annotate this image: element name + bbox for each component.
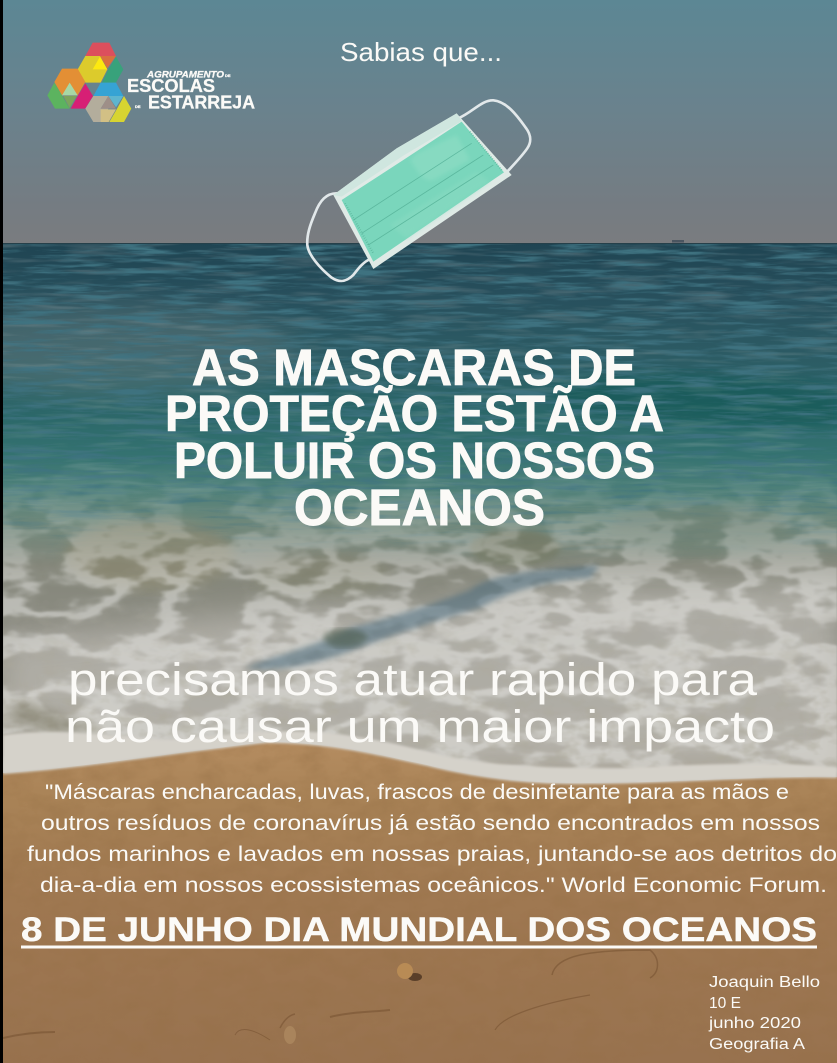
- distant ship: [672, 240, 684, 242]
- wet sand: [3, 735, 837, 1063]
- logo wordmark: ESCOLAS: [127, 76, 215, 96]
- mask ear loops: [307, 100, 530, 281]
- author credits: junho 2020: [708, 1015, 801, 1032]
- subtitle: [65, 654, 775, 752]
- quote from World Economic Forum: fundos marinhos e lavados em nossas praias, juntando-se aos detritos do: [27, 843, 837, 866]
- foam and wet sand texture: [70, 517, 226, 584]
- heading: World Oceans Day: 8 DE JUNHO DIA MUNDIAL DOS OCEANOS: [21, 911, 817, 949]
- main title: PROTEÇÃO ESTÃO A: [165, 384, 664, 442]
- author credits: Joaquin Bello: [709, 974, 820, 991]
- author credits: [708, 974, 820, 1053]
- main title: AS MASCARAS DE: [192, 339, 636, 396]
- logo: Agrupamento de Escolas de Estarreja: [47, 43, 255, 122]
- logo mark: coloured hexagons: [47, 43, 131, 122]
- main title: [165, 339, 664, 536]
- logo wordmark: [127, 70, 255, 112]
- shoreline foam: [3, 731, 837, 784]
- mask stitched edges: [345, 132, 502, 253]
- main title: POLUIR OS NOSSOS: [174, 432, 655, 489]
- quote from World Economic Forum: [27, 781, 837, 897]
- surgical mask illustration: [307, 100, 530, 281]
- logo wordmark: AGRUPAMENTO: [146, 70, 225, 80]
- subtitle: precisamos atuar rapido para: [68, 654, 758, 705]
- logo wordmark: ESTARREJA: [148, 92, 255, 112]
- main title: OCEANOS: [294, 479, 545, 536]
- author credits: Geografia A: [709, 1036, 806, 1053]
- intro text: Sabias que: Sabias que...: [340, 37, 502, 67]
- quote from World Economic Forum: outros resíduos de coronavírus já estão sendo encontrados em nossos: [41, 812, 820, 835]
- quote from World Economic Forum: dia-a-dia em nossos ecossistemas oceânicos." World Economic Forum.: [40, 874, 827, 897]
- logo wordmark: DE: [225, 73, 231, 78]
- logo wordmark: DE: [135, 104, 141, 109]
- quote from World Economic Forum: "Máscaras encharcadas, luvas, frascos de desinfetante para as mãos e: [45, 781, 789, 804]
- mask body: [333, 113, 512, 269]
- mask pleats: [353, 143, 493, 245]
- subtitle: não causar um maior impacto: [65, 701, 775, 752]
- author credits: 10 E: [709, 995, 741, 1012]
